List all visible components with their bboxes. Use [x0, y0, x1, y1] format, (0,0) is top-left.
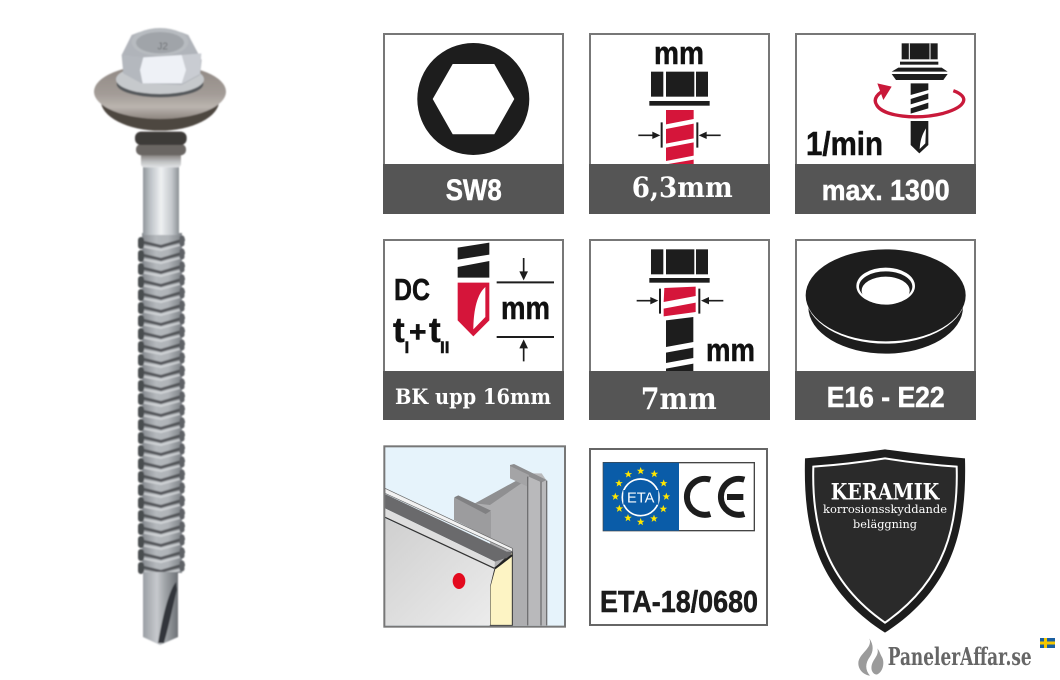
- screw photo: [94, 28, 226, 645]
- icon: drill tip: [458, 243, 554, 361]
- label: t1+t2: t: [393, 311, 405, 350]
- panel: thread diameter: [589, 34, 770, 214]
- icon: Swedish flag: [1040, 638, 1055, 648]
- value: max. 1300: [822, 175, 950, 207]
- panel: rotation speed: [795, 34, 976, 214]
- label bar: [795, 164, 976, 214]
- badge text: [823, 502, 947, 531]
- ETA CE logo: [603, 463, 754, 531]
- unit: 1/min: [806, 125, 883, 162]
- label: DC: DC: [394, 272, 430, 307]
- unit: mm: [501, 290, 550, 326]
- icon: screw diameter: [638, 72, 721, 164]
- approval number: ETA-18/0680: [600, 584, 758, 619]
- label bar: [383, 164, 564, 214]
- steel beam: [454, 464, 547, 625]
- value: SW8: [446, 174, 502, 207]
- icon: sealing washer: [806, 247, 966, 354]
- screw neck: [135, 132, 187, 167]
- panel: washer: [795, 240, 976, 420]
- unit: mm: [654, 35, 704, 71]
- badge: ceramic coating shield: [805, 449, 965, 633]
- label bar: [589, 164, 770, 214]
- label: t1+t2: II: [440, 338, 449, 357]
- label: t1+t2: I: [404, 338, 409, 357]
- badge text: korrosionsskyddande: [823, 502, 947, 516]
- label: t1+t2: t: [429, 311, 441, 350]
- screw smooth shank: [143, 165, 179, 235]
- screw thread: [139, 233, 185, 573]
- panel: drill capacity: [383, 240, 564, 420]
- unit: mm: [706, 332, 755, 368]
- label: t1+t2: [393, 311, 449, 357]
- panel: application illustration: [384, 446, 565, 627]
- label bar: [589, 371, 770, 420]
- label bar: [383, 371, 564, 420]
- panel: SW8: [383, 34, 564, 214]
- badge heading: KERAMIK: [831, 480, 940, 506]
- icon: screw length: [637, 249, 723, 371]
- label bar: [795, 371, 976, 420]
- screw hex head: J2: [157, 41, 168, 52]
- icon: flame: [858, 638, 883, 676]
- screw drill tip: [143, 572, 178, 645]
- badge text: beläggning: [853, 517, 918, 531]
- value: E16 - E22: [827, 382, 945, 414]
- label: t1+t2: +: [409, 316, 427, 349]
- icon: hex socket: [417, 43, 529, 155]
- logo: PanelerAffar.se: [858, 638, 1055, 676]
- sandwich panel face: [385, 518, 494, 625]
- screw rubber washer: [94, 64, 226, 131]
- value: 6,3mm: [632, 171, 733, 204]
- icon: rotating screw: [875, 43, 964, 153]
- panel: ETA certification: [590, 449, 767, 625]
- panel: length: [589, 240, 770, 420]
- insulation core: [490, 552, 512, 625]
- fastener marker: [453, 573, 465, 589]
- screw steel washer: [116, 65, 204, 97]
- value: BK upp 16mm: [395, 384, 551, 409]
- value: 7mm: [641, 382, 717, 417]
- panel top flashing: [385, 488, 512, 568]
- ETA CE logo: ETA: [627, 490, 655, 506]
